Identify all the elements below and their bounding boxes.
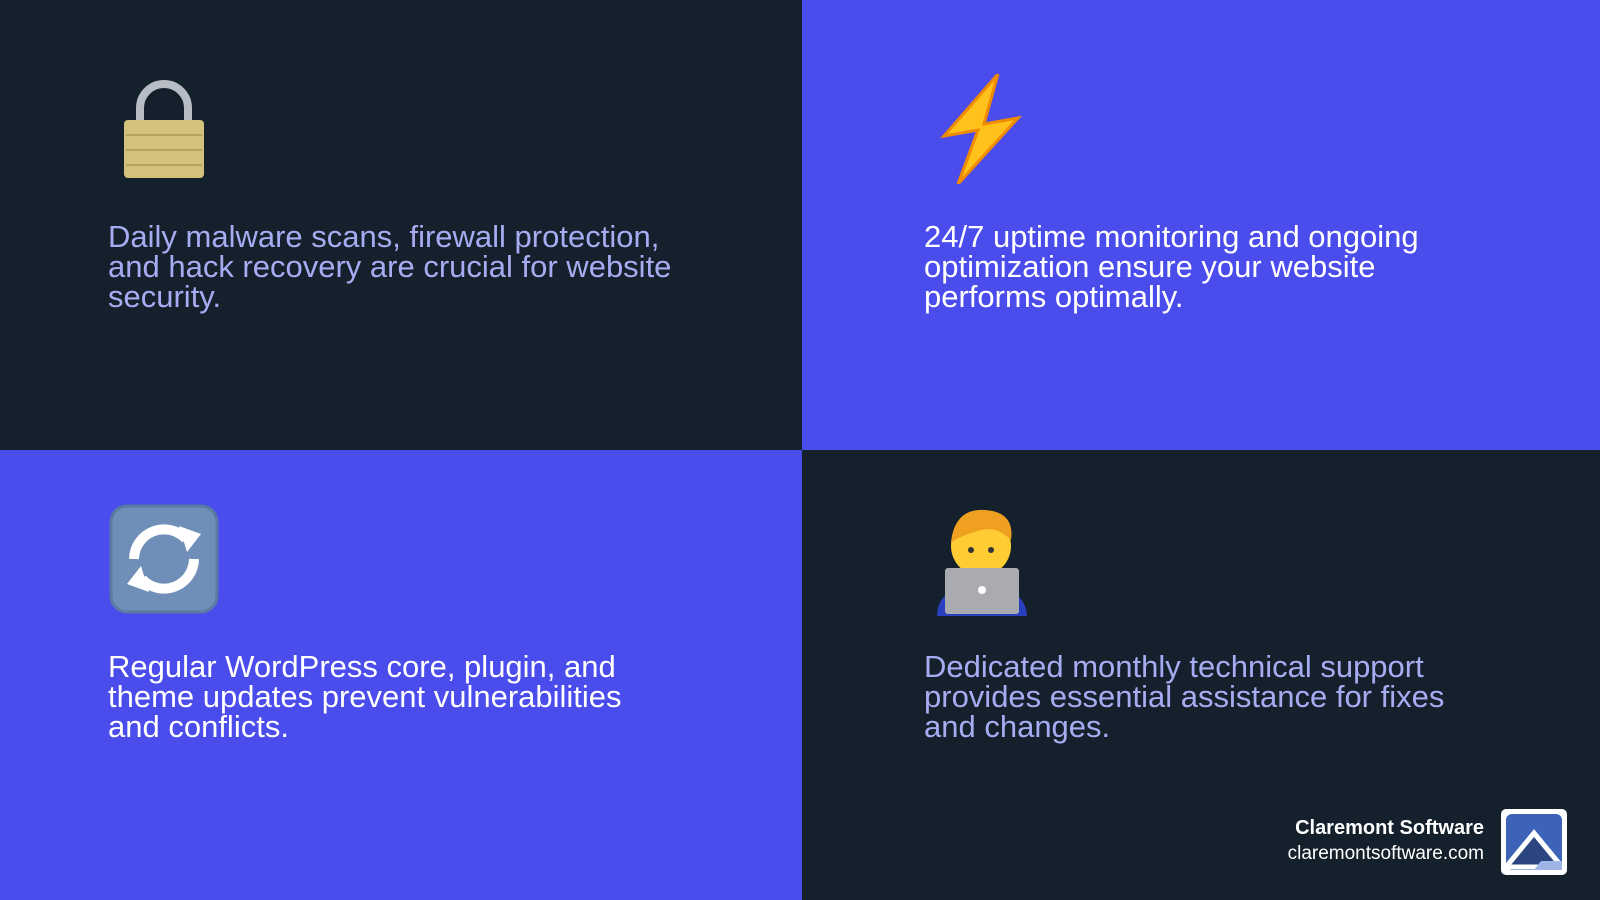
text: updates	[108, 649, 622, 744]
text: support: Dedicated monthly technical support	[924, 649, 1424, 684]
text: updates: theme updates prevent vulnerabilities	[108, 679, 622, 714]
icon: refresh	[110, 504, 218, 614]
text: support: provides essential assistance for fixes	[924, 679, 1444, 714]
brand text: Claremont Software	[1295, 817, 1484, 839]
icon: lock	[124, 80, 204, 178]
text: performance	[924, 219, 1419, 314]
text: security: security.	[108, 279, 221, 314]
brand block	[1288, 809, 1567, 875]
text: support	[924, 649, 1444, 744]
panel: support	[802, 450, 1600, 900]
text: performance: 24/7 uptime monitoring and ongoing	[924, 219, 1419, 254]
brand text	[1288, 817, 1484, 864]
panel: security	[0, 0, 802, 450]
icon: technologist	[937, 510, 1027, 616]
text: security: Daily malware scans, firewall protection,	[108, 219, 659, 254]
text: security	[108, 219, 671, 314]
text: security: and hack recovery are crucial for website	[108, 249, 671, 284]
text: updates: and conflicts.	[108, 709, 289, 744]
icon: lightning	[940, 74, 1022, 184]
logo	[1501, 809, 1567, 875]
panel: performance	[802, 0, 1600, 450]
text: support: and changes.	[924, 709, 1110, 744]
text: performance: optimization ensure your website	[924, 249, 1375, 284]
panel: updates	[0, 450, 802, 900]
text: updates: Regular WordPress core, plugin, and	[108, 649, 616, 684]
text: performance: performs optimally.	[924, 279, 1184, 314]
brand text: claremontsoftware.com	[1288, 843, 1484, 864]
